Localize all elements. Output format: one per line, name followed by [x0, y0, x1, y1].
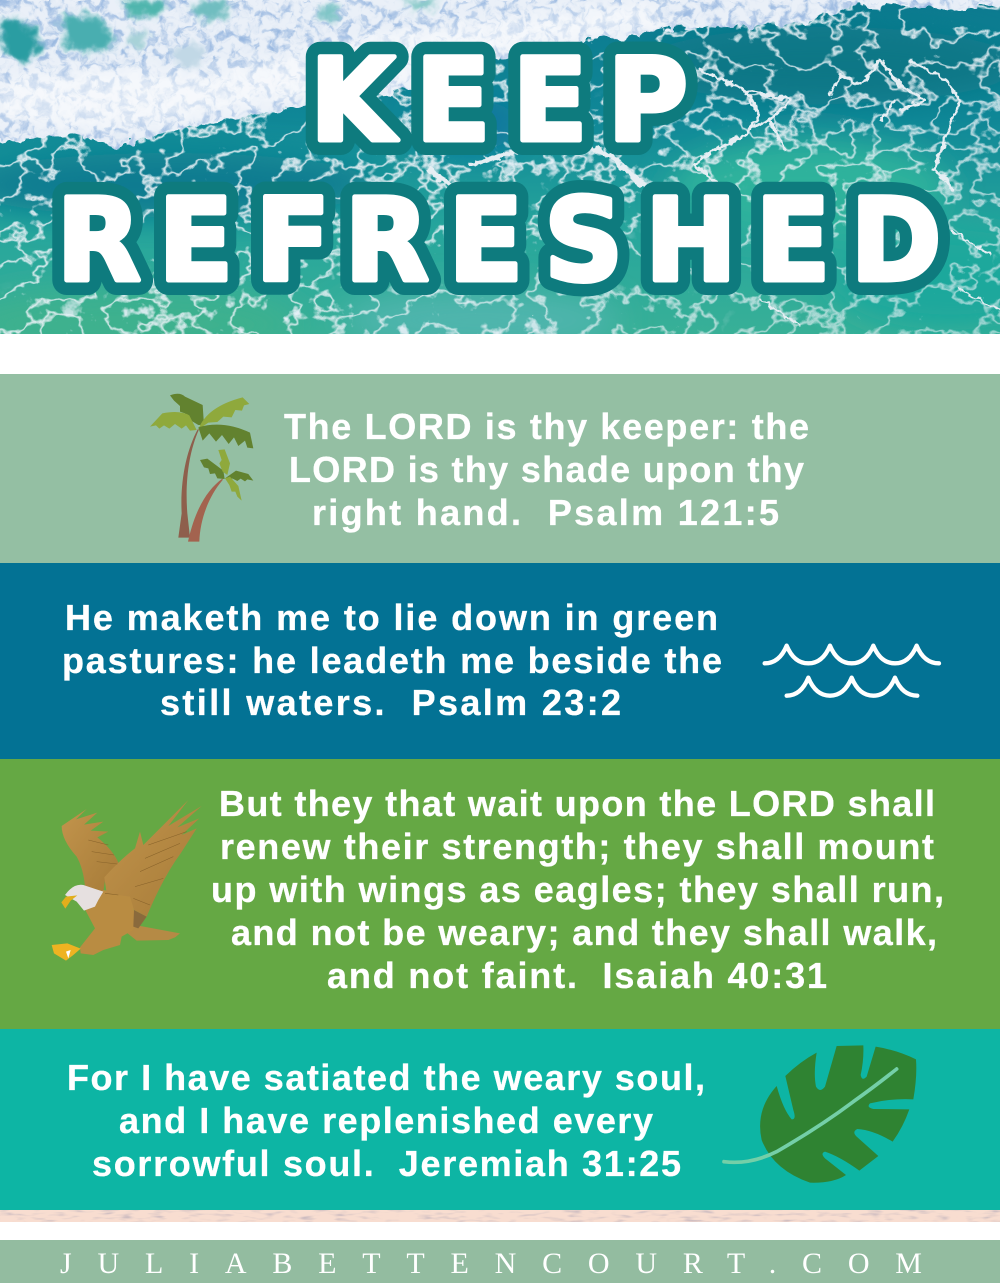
verse text: renew their strength; they shall mount	[220, 826, 934, 867]
verse text	[62, 597, 722, 723]
verse text: still waters. Psalm 23:2	[160, 682, 621, 723]
verse text: and I have replenished every	[119, 1100, 653, 1141]
verse text: LORD is thy shade upon thy	[289, 449, 804, 490]
icon: palm trees	[150, 394, 253, 542]
verse text: right hand. Psalm 121:5	[312, 492, 779, 533]
sand strip	[0, 1210, 1000, 1222]
verse text	[284, 406, 809, 533]
verse text: He maketh me to lie down in green	[65, 597, 718, 638]
icon: monstera leaf	[724, 1045, 916, 1183]
verse text: For I have satiated the weary soul,	[67, 1057, 705, 1098]
header: ocean photo with title	[0, 0, 1000, 361]
title: KEEP: KEEP	[310, 35, 688, 168]
verse text: pastures: he leadeth me beside the	[62, 640, 722, 681]
icon: eagle	[52, 800, 202, 961]
verse text	[67, 1057, 705, 1184]
panel: Psalm 121:5	[0, 374, 1000, 564]
panel: Isaiah 40:31	[0, 759, 1000, 1029]
verse text	[211, 783, 944, 996]
icon: water waves	[765, 646, 939, 696]
verse text: and not be weary; and they shall walk,	[231, 912, 937, 953]
footer band	[0, 1240, 1000, 1283]
title: REFRESHED: REFRESHED	[57, 175, 941, 308]
panel: Psalm 23:2	[0, 563, 1000, 759]
verse text: and not faint. Isaiah 40:31	[327, 955, 827, 996]
panel: Jeremiah 31:25	[0, 1029, 1000, 1210]
verse text: But they that wait upon the LORD shall	[219, 783, 935, 824]
title: KEEP: KEEP	[310, 35, 688, 168]
white foam crest	[0, 0, 1000, 160]
website address: JULIABETTENCOURT.COM	[60, 1247, 922, 1280]
verse text: up with wings as eagles; they shall run,	[211, 869, 944, 910]
verse text: The LORD is thy keeper: the	[284, 406, 809, 447]
foam veins	[430, 60, 1000, 325]
verse text: sorrowful soul. Jeremiah 31:25	[92, 1143, 681, 1184]
ocean background	[0, 0, 1000, 361]
title: REFRESHED: REFRESHED	[57, 175, 941, 308]
